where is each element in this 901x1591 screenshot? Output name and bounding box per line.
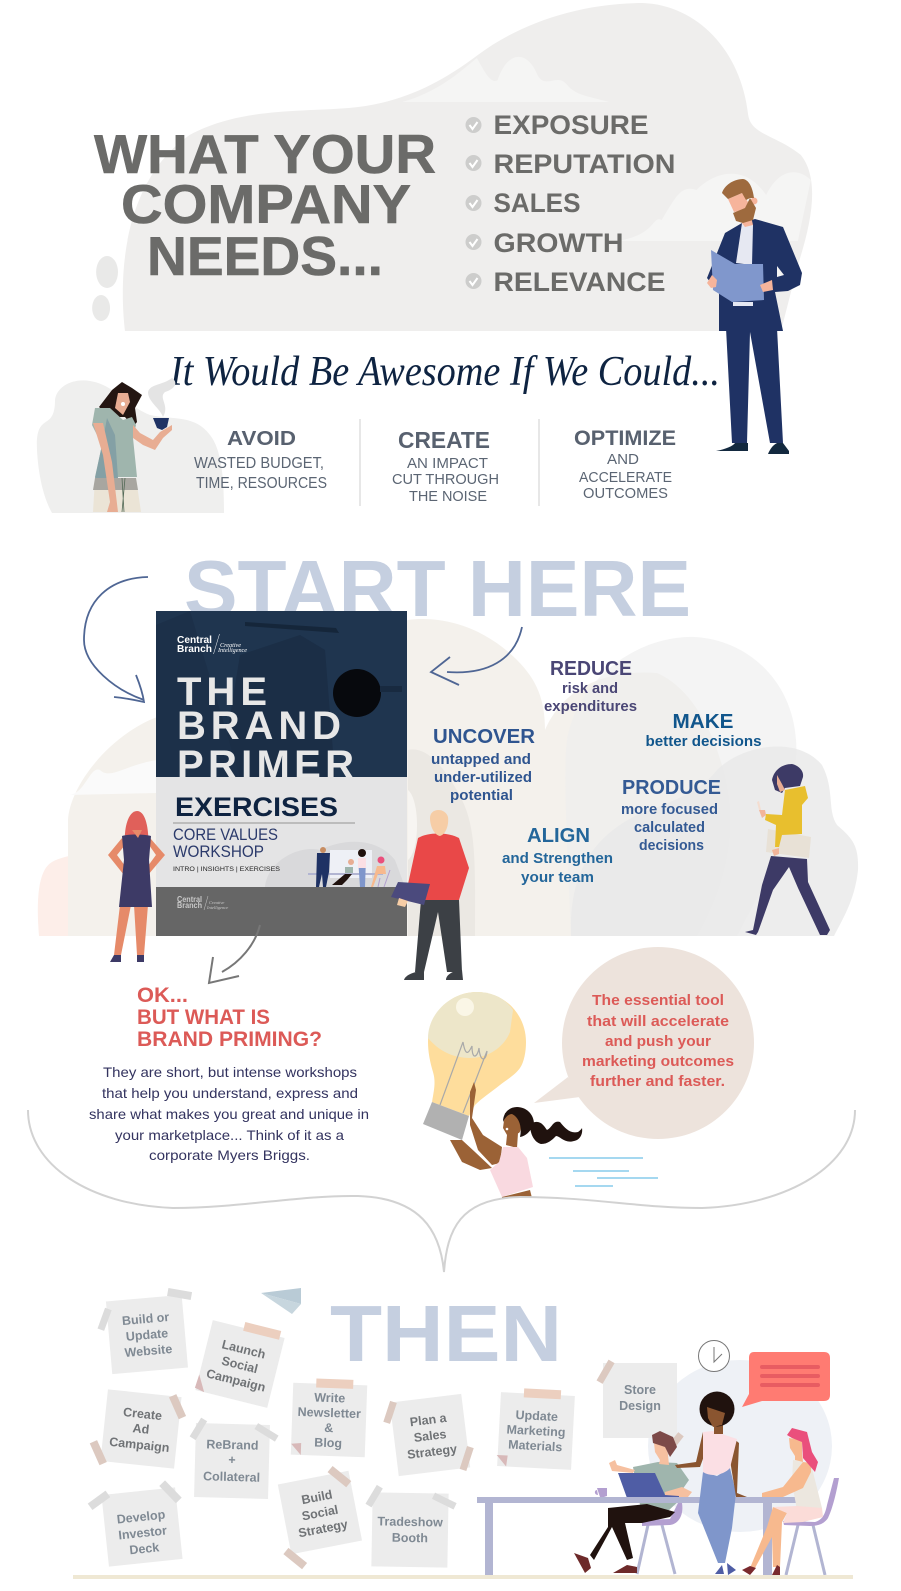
logo: central branch small: Intelligence	[206, 905, 228, 910]
benefit: uncover	[431, 725, 535, 804]
cover photo	[156, 611, 402, 777]
note: tradeshow booth: Tradeshow	[377, 1514, 443, 1530]
light bulb	[423, 992, 526, 1140]
man in red sweater	[391, 810, 469, 980]
cover heading: EXERCISES	[175, 792, 338, 822]
column: avoid: WASTED BUDGET,	[194, 455, 324, 472]
note: tradeshow booth: Booth	[392, 1531, 428, 1545]
check item: exposure: EXPOSURE	[494, 110, 648, 140]
arrow: into book from left	[84, 577, 148, 702]
column: optimize: OPTIMIZE	[574, 427, 676, 450]
title	[94, 123, 436, 287]
note: write newsletter and blog: Blog	[314, 1436, 342, 1450]
check item: growth: GROWTH	[494, 228, 624, 258]
column: avoid	[194, 428, 327, 492]
note: develop investor deck: Investor	[118, 1523, 168, 1542]
note: rebrand plus collateral: Collateral	[203, 1469, 260, 1485]
note: build or update website: Website	[124, 1342, 173, 1360]
note: store design	[597, 1360, 684, 1455]
note: develop investor deck: Deck	[129, 1540, 160, 1557]
check item: reputation: REPUTATION	[494, 149, 676, 179]
scene circle, clock	[648, 1340, 832, 1532]
note: launch social campaign: Social	[220, 1354, 259, 1376]
title: COMPANY	[121, 173, 411, 235]
chair left	[637, 1503, 682, 1574]
benefit: uncover: potential	[450, 788, 513, 804]
note: launch social campaign: Campaign	[205, 1366, 267, 1395]
check item: sales: SALES	[494, 188, 580, 218]
benefit: produce: decisions	[639, 838, 704, 854]
woman with coffee	[37, 378, 224, 513]
divider	[360, 419, 361, 506]
note: develop investor deck: Develop	[116, 1508, 166, 1527]
workshop title: WORKSHOP	[173, 842, 264, 861]
book cover: the brand primer: INTRO | INSIGHTS | EXERCISES	[173, 866, 281, 873]
note: rebrand plus collateral	[188, 1417, 279, 1499]
column: optimize: AND	[607, 451, 639, 468]
top background blob	[92, 3, 812, 331]
cover title: PRIMER	[177, 743, 354, 787]
note: build or update website: Build or	[121, 1310, 170, 1328]
heading: start here: START HERE	[184, 544, 691, 633]
speech bubble	[534, 947, 754, 1139]
standing woman	[675, 1392, 747, 1575]
paragraph: corporate Myers Briggs.	[149, 1147, 310, 1163]
note: develop investor deck	[86, 1479, 188, 1568]
column: create: CREATE	[398, 427, 490, 453]
note: store design: Store	[624, 1383, 656, 1397]
cover title	[177, 678, 352, 777]
note: store design: Design	[619, 1399, 661, 1413]
right woman	[742, 1428, 823, 1575]
benefit: make: MAKE	[672, 710, 734, 733]
note: plan a sales strategy	[381, 1391, 476, 1480]
benefit: align	[502, 824, 613, 886]
note: launch social campaign: Launch	[220, 1337, 267, 1362]
workshop title: CORE VALUES	[173, 825, 278, 844]
ground line	[73, 1575, 853, 1579]
workshop title	[173, 825, 278, 861]
logo: central branch	[177, 634, 247, 655]
note: launch social campaign	[194, 1314, 286, 1408]
benefit: make: better decisions	[646, 734, 762, 750]
title: NEEDS...	[147, 225, 383, 287]
benefit: produce: calculated	[634, 820, 705, 836]
seated man	[574, 1431, 692, 1573]
note: tradeshow booth	[364, 1485, 457, 1568]
note: create ad campaign: Create	[122, 1405, 163, 1423]
cover title: THE	[177, 670, 267, 714]
logo: central branch: Intelligence	[217, 648, 247, 654]
mini team illustration	[265, 842, 405, 887]
note: create ad campaign: Ad	[132, 1421, 150, 1437]
man in suit with folder	[707, 179, 802, 454]
logo: central branch small: Branch	[177, 901, 202, 910]
paragraph: that help you understand, express and	[102, 1085, 358, 1101]
column: create: THE NOISE	[409, 488, 487, 505]
speech bubble: further and faster.	[590, 1073, 725, 1090]
note: build social strategy: Build	[300, 1487, 334, 1507]
note: update marketing materials	[496, 1387, 575, 1470]
speech icon	[742, 1352, 830, 1407]
middle background blobs	[38, 619, 858, 936]
column: create: CUT THROUGH	[392, 471, 499, 488]
paragraph: your marketplace... Think of it as a	[115, 1127, 344, 1143]
note: build or update website: Update	[125, 1326, 169, 1344]
note: write newsletter and blog	[291, 1378, 367, 1457]
column: optimize: OUTCOMES	[583, 485, 668, 502]
paragraph: They are short, but intense workshops	[103, 1064, 357, 1080]
note: write newsletter and blog: Newsletter	[297, 1405, 361, 1421]
title: WHAT YOUR	[94, 123, 436, 185]
heading: but what is brand priming: BRAND PRIMING?	[137, 1028, 322, 1051]
paragraph	[89, 1064, 369, 1163]
heading: but what is brand priming: BUT WHAT IS	[137, 1006, 270, 1029]
heading: but what is brand priming: OK...	[137, 984, 188, 1007]
note: build social strategy: Social	[301, 1503, 339, 1523]
column: optimize	[574, 427, 676, 502]
note: build or update website	[95, 1286, 199, 1375]
logo: central branch small: Central	[177, 895, 202, 904]
woman in navy dress	[108, 811, 165, 962]
benefit: produce: more focused	[621, 802, 718, 818]
column: avoid: TIME, RESOURCES	[196, 475, 327, 492]
note: create ad campaign: Campaign	[109, 1435, 170, 1455]
chair right	[783, 1478, 839, 1575]
girl holding bulb	[450, 1082, 582, 1198]
paper plane	[261, 1288, 301, 1314]
divider	[538, 419, 540, 506]
bracket curve	[28, 1110, 855, 1272]
woman in yellow hoodie	[745, 764, 830, 935]
subtitle: it would be awesome: It Would Be Awesome If We Could...	[169, 349, 720, 395]
column: create: AN IMPACT	[407, 455, 488, 472]
note: update marketing materials: Materials	[508, 1438, 563, 1454]
arrow: down to explanation	[209, 925, 260, 983]
benefit: uncover: UNCOVER	[433, 725, 535, 748]
benefit: make	[646, 710, 762, 750]
logo: central branch: Branch	[177, 643, 212, 655]
note: rebrand plus collateral: +	[228, 1453, 236, 1467]
benefit: align: and Strengthen	[502, 851, 613, 867]
benefit: uncover: under-utilized	[434, 770, 532, 786]
note: create ad campaign	[88, 1386, 188, 1474]
note: plan a sales strategy: Plan a	[409, 1411, 448, 1429]
note: update marketing materials: Update	[515, 1408, 558, 1424]
note: write newsletter and blog: &	[324, 1421, 333, 1435]
benefit: align: your team	[521, 870, 594, 886]
speech bubble: The essential tool	[592, 992, 724, 1009]
benefit: align: ALIGN	[527, 824, 590, 847]
logo: central branch: Central	[177, 634, 212, 646]
note: plan a sales strategy: Strategy	[406, 1442, 458, 1462]
speech bubble: and push your	[605, 1033, 711, 1050]
book cover: the brand primer	[156, 611, 407, 936]
note: plan a sales strategy: Sales	[413, 1427, 447, 1445]
team at table	[477, 1392, 839, 1575]
heading: then: THEN	[330, 1289, 562, 1378]
benefit: reduce: REDUCE	[550, 657, 632, 680]
speech bubble: marketing outcomes	[582, 1053, 734, 1070]
arrow: into book from right	[431, 627, 522, 685]
paragraph: share what makes you great and unique in	[89, 1106, 369, 1122]
logo: central branch small	[177, 895, 228, 910]
motion lines	[549, 1157, 658, 1187]
note: update marketing materials: Marketing	[506, 1422, 566, 1440]
benefit: produce	[621, 776, 721, 854]
column: create	[392, 427, 499, 505]
benefit: produce: PRODUCE	[622, 776, 721, 799]
benefit: reduce: expenditures	[544, 699, 637, 715]
cover title: BRAND	[177, 704, 341, 748]
note: write newsletter and blog: Write	[314, 1390, 346, 1406]
table	[477, 1497, 796, 1575]
logo: central branch: Creative	[220, 643, 241, 649]
note: build social strategy	[269, 1463, 366, 1572]
column: optimize: ACCELERATE	[579, 469, 672, 486]
note: rebrand plus collateral: ReBrand	[206, 1437, 259, 1453]
benefit: reduce	[544, 657, 637, 715]
logo: central branch small: Creative	[209, 900, 224, 905]
benefit: reduce: risk and	[562, 681, 618, 697]
checklist	[466, 110, 676, 297]
note: build social strategy: Strategy	[297, 1517, 349, 1540]
speech bubble: that will accelerate	[587, 1013, 729, 1030]
check item: relevance: RELEVANCE	[494, 267, 666, 297]
benefit: uncover: untapped and	[431, 752, 531, 768]
heading: but what is brand priming	[137, 984, 322, 1051]
column: avoid: AVOID	[227, 428, 296, 450]
